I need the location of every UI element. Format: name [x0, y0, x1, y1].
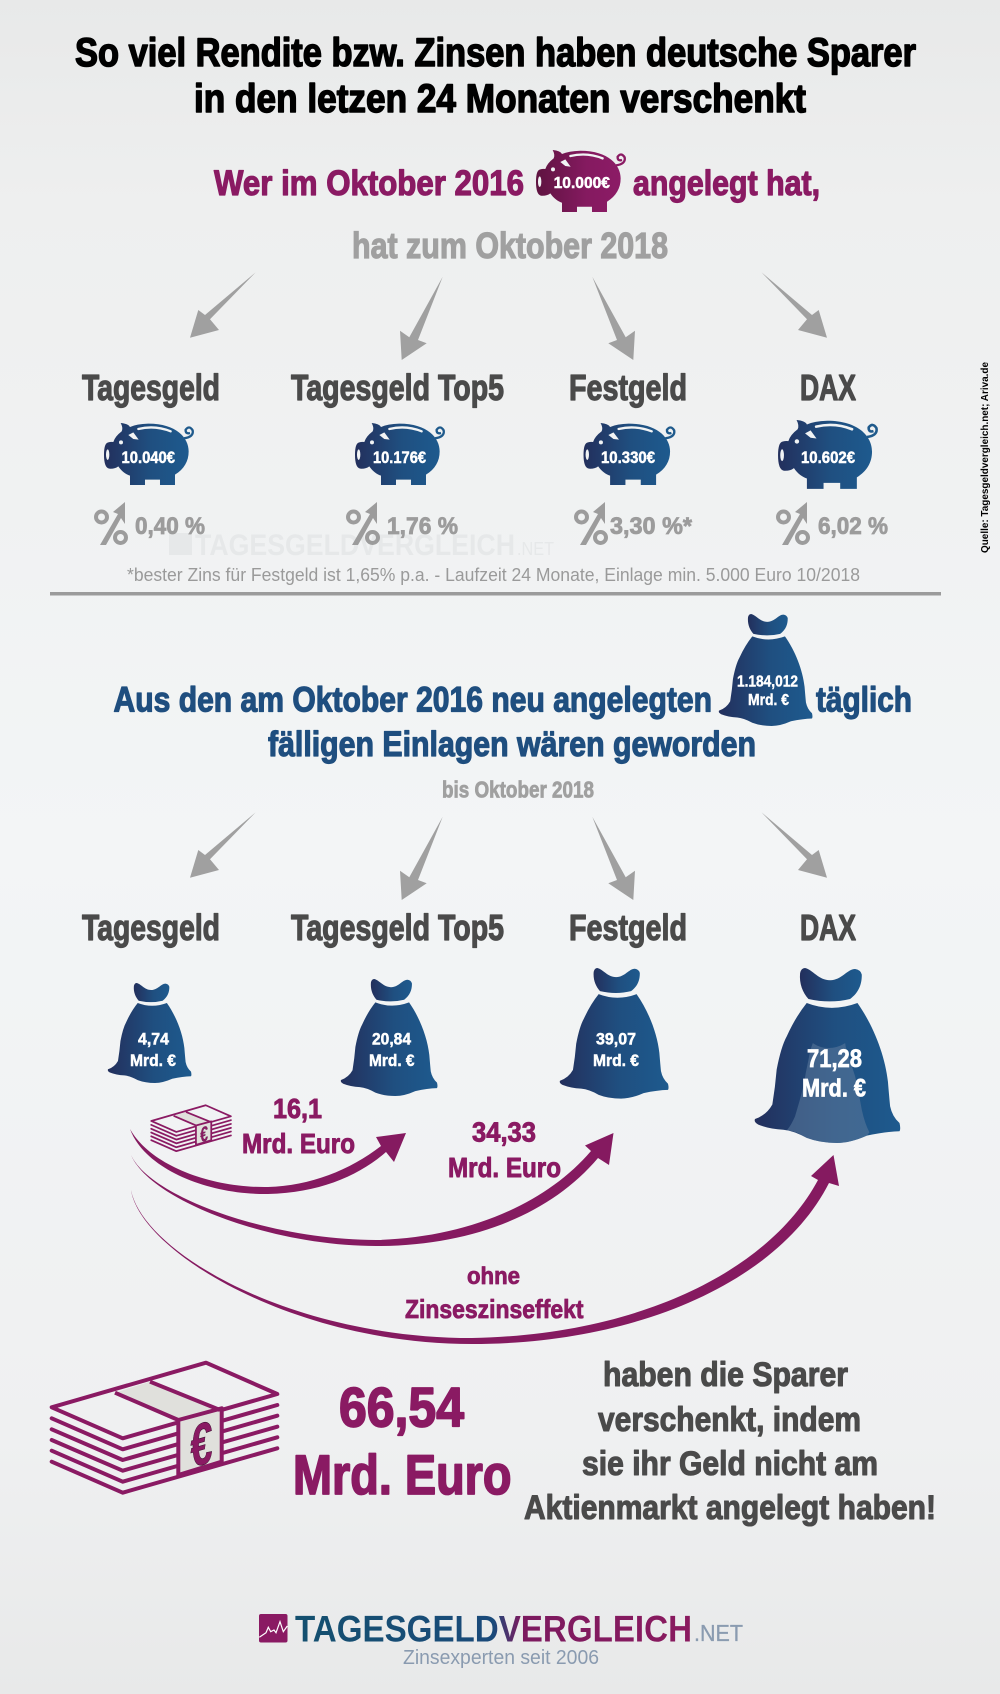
heading: Aus den am Oktober 2016 — [114, 680, 912, 764]
column labels: top section: Tagesgeld Top5 — [291, 367, 504, 408]
footnote: *bester Zins für Festgeld ist 1,65% p.a. - Laufzeit 24 Monate, Einlage min. 5.000 Euro 10/2018 — [127, 565, 860, 585]
icon: purple piggy bank 10.000€: 10.000€ — [554, 175, 610, 192]
icon: money bag 1.184,012: 1.184,012 — [737, 674, 798, 690]
source note: Quelle: Tagesgeldvergleich.net; Ariva.de — [980, 362, 991, 553]
icon: money bag 4,74 — [108, 983, 191, 1083]
value label: 34,33 Mrd. Euro: 34,33 — [472, 1116, 536, 1148]
column labels: lower section: DAX — [800, 907, 856, 948]
conclusion text: haben die Sparer — [603, 1356, 848, 1394]
heading: Aus den am Oktober 2016: täglich — [816, 680, 912, 720]
value label: 16,1 Mrd. Euro: 16,1 — [273, 1093, 322, 1124]
total: 66,54 Mrd. Euro: 66,54 — [339, 1376, 464, 1438]
heading: Aus den am Oktober 2016: fälligen Einlagen wären geworden — [268, 725, 756, 764]
icon: money bag 20,84 — [341, 979, 437, 1096]
icon: large money stack: € — [190, 1408, 212, 1481]
column labels: lower section: Festgeld — [569, 907, 687, 948]
icon: money bag 71,28: 71,28 — [807, 1045, 862, 1073]
column labels: top section: DAX — [800, 367, 856, 408]
column labels: lower section: Tagesgeld — [82, 907, 220, 948]
icon: small money stack — [151, 1105, 231, 1151]
icon: blue piggy bank 10.040€: 10.040€ — [122, 448, 175, 467]
icon: small money stack: € — [200, 1121, 208, 1147]
icon: money bag 39,07: Mrd. € — [593, 1051, 640, 1070]
rate: Tagesgeld Top5 1,76 %: 1,76 % — [387, 513, 458, 540]
icon: blue piggy bank 10.176€ — [355, 423, 444, 485]
icon: money bag 1.184,012: Mrd. € — [748, 692, 789, 709]
icon: money bag 4,74: 4,74 — [138, 1030, 170, 1048]
icon: purple piggy bank 10.000€ — [536, 150, 625, 212]
icon: blue piggy bank 10.330€ — [584, 423, 674, 485]
conclusion text — [524, 1356, 936, 1527]
icon: blue piggy bank 10.330€: 10.330€ — [601, 448, 655, 467]
column labels: top section — [82, 367, 856, 408]
value label: 34,33 Mrd. Euro: Mrd. Euro — [448, 1152, 561, 1183]
subheading: hat zum Oktober 2018: hat zum Oktober 2018 — [352, 225, 668, 266]
label: ohne Zinseszinseffekt — [405, 1263, 584, 1324]
rate: DAX 6,02 %: 6,02 % — [818, 513, 888, 540]
heading: Aus den am Oktober 2016: Aus den am Oktober 2016 neu angelegten — [114, 680, 712, 720]
arrow: Tagesgeld to Top5 — [130, 1129, 406, 1194]
logo: Zinsexperten seit 2006 — [403, 1647, 599, 1669]
conclusion text: verschenkt, indem — [598, 1401, 861, 1439]
column labels: top section: Festgeld — [569, 367, 687, 408]
value label: 16,1 Mrd. Euro — [242, 1093, 355, 1159]
label: ohne Zinseszinseffekt: Zinseszinseffekt — [405, 1294, 584, 1324]
icon: large money stack — [52, 1363, 277, 1493]
title — [75, 31, 916, 121]
value label: 34,33 Mrd. Euro — [448, 1116, 561, 1183]
icon: money bag 4,74: Mrd. € — [130, 1051, 177, 1070]
watermark: .NET — [517, 539, 554, 559]
icon: blue piggy bank 10.602€: 10.602€ — [801, 448, 855, 467]
icon: money bag 71,28: Mrd. € — [802, 1074, 866, 1102]
logo: TAGESGELDVERGLEICH — [295, 1608, 692, 1650]
rate: Tagesgeld 0,40 % — [96, 502, 205, 545]
icon: money bag 1.184,012 — [719, 614, 812, 726]
heading: Wer im Oktober 2016 angelegt hat: Wer im Oktober 2016 — [214, 164, 524, 203]
icon: money bag 20,84: 20,84 — [372, 1030, 411, 1048]
conclusion text: sie ihr Geld nicht am — [582, 1445, 878, 1483]
icon: money bag 39,07 — [560, 968, 669, 1099]
heading: Wer im Oktober 2016 angelegt hat: angelegt hat, — [633, 164, 820, 203]
icon: blue piggy bank 10.602€ — [778, 420, 877, 489]
rate: DAX 6,02 % — [778, 502, 888, 545]
column labels: lower section — [82, 907, 856, 948]
subheading: bis Oktober 2018: bis Oktober 2018 — [442, 776, 594, 802]
logo — [259, 1608, 743, 1669]
rate: Festgeld 3,30 %*: 3,30 %* — [610, 513, 693, 540]
watermark: TAGESGELDVERGLEICH — [195, 529, 515, 562]
conclusion text: Aktienmarkt angelegt haben! — [524, 1489, 936, 1527]
label: ohne Zinseszinseffekt: ohne — [467, 1263, 520, 1290]
arrows: lower section — [190, 812, 827, 900]
icon: money bag 20,84: Mrd. € — [369, 1051, 415, 1070]
icon: money bag 71,28 — [755, 968, 900, 1143]
column labels: top section: Tagesgeld — [82, 367, 220, 408]
value label: 16,1 Mrd. Euro: Mrd. Euro — [242, 1128, 355, 1159]
rate: Tagesgeld 0,40 %: 0,40 % — [135, 513, 205, 540]
title: in den letzen 24 Monaten verschenkt — [194, 77, 806, 121]
heading: Wer im Oktober 2016 angelegt hat — [214, 164, 820, 203]
arrow: Tagesgeld to DAX — [131, 1155, 839, 1344]
total: 66,54 Mrd. Euro: Mrd. Euro — [293, 1443, 512, 1506]
rate: Tagesgeld Top5 1,76 % — [348, 502, 458, 545]
icon: blue piggy bank 10.040€ — [104, 423, 193, 485]
column labels: lower section: Tagesgeld Top5 — [291, 907, 504, 948]
arrows: top section — [190, 272, 827, 360]
logo: .NET — [694, 1620, 743, 1646]
rate: Festgeld 3,30 %* — [576, 502, 693, 545]
arrow: Tagesgeld to Festgeld — [131, 1133, 614, 1246]
icon: blue piggy bank 10.176€: 10.176€ — [373, 448, 426, 467]
icon: money bag 39,07: 39,07 — [596, 1030, 636, 1048]
total: 66,54 Mrd. Euro — [293, 1376, 512, 1506]
